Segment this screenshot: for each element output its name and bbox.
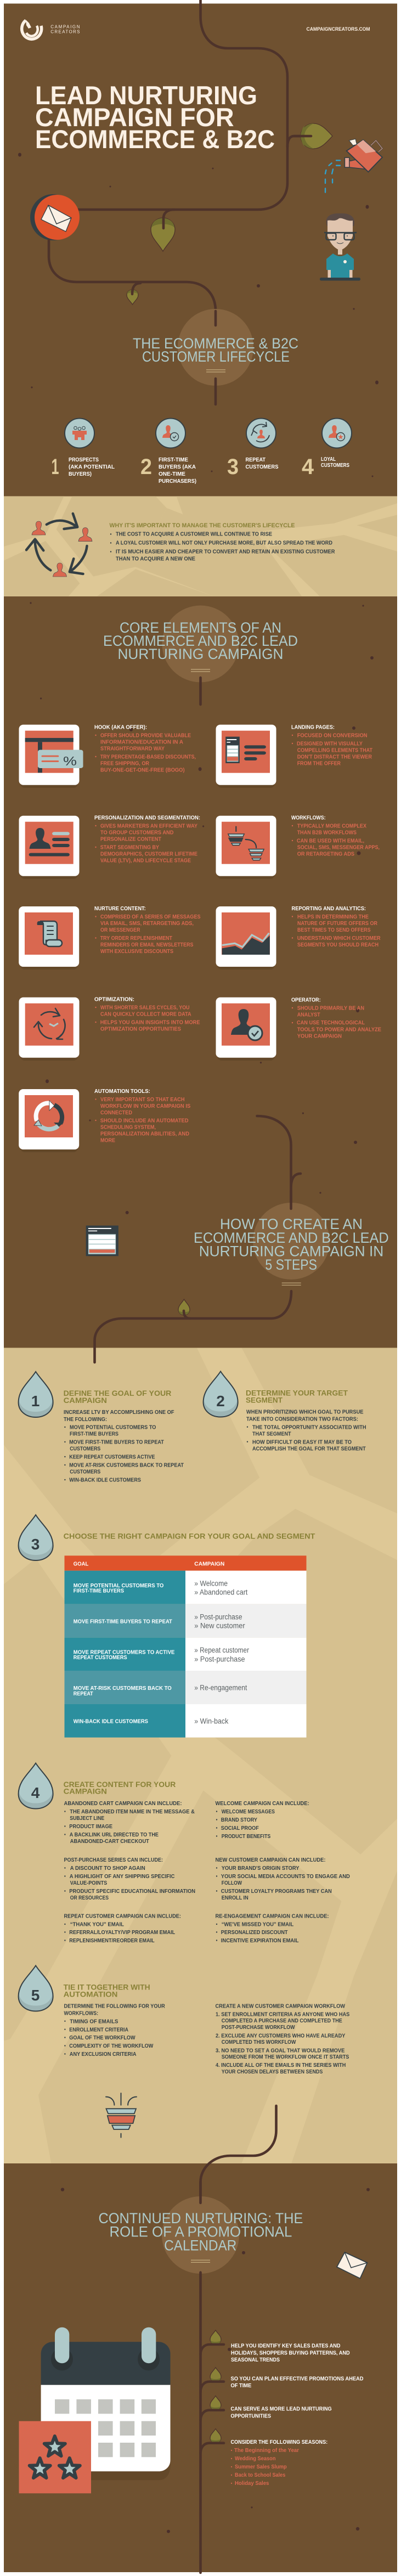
item: more opportunities: CAN SERVE AS MORE LEAD NURTURING bbox=[230, 2406, 332, 2412]
lifecycle stage 2: ONE-TIME bbox=[159, 471, 185, 477]
text: personalization: TO GROUP CUSTOMERS AND bbox=[100, 830, 173, 836]
icon: repeat customer circle bbox=[246, 418, 276, 448]
card: hook bbox=[19, 725, 83, 788]
icon: customer cycle bbox=[26, 514, 92, 577]
text: repeat customer: REPLENISHMENT/REORDER EMAIL bbox=[69, 1938, 155, 1944]
item: key dates: HOLIDAYS, SHOPPERS BUYING PATTERNS, AND bbox=[231, 2350, 350, 2356]
stem: lower vine bbox=[49, 240, 216, 325]
text: abandoned cart: ABANDONED-CART CHECKOUT bbox=[70, 1839, 149, 1845]
step 1: FIRST-TIME BUYERS bbox=[70, 1431, 118, 1438]
text: personalization bbox=[94, 815, 200, 864]
text: optimization: OPTIMIZATION OPPORTUNITIES bbox=[100, 1027, 181, 1033]
text: new customer: YOUR BRAND'S ORIGIN STORY bbox=[222, 1865, 300, 1872]
text: workflows: SOCIAL, SMS, MESSENGER APPS, bbox=[297, 845, 380, 851]
text: personalization: PERSONALIZE CONTENT bbox=[100, 837, 161, 843]
step 5 bbox=[19, 1965, 350, 2075]
lifecycle stage 4: LOYAL bbox=[321, 456, 336, 463]
text: optimization: HELPS YOU GAIN INSIGHTS INTO MORE bbox=[100, 1019, 200, 1025]
illustration: marketer at desk bbox=[320, 213, 360, 281]
text: automation tools: SCHEDULING SYSTEM, bbox=[100, 1125, 156, 1131]
text: automation tools bbox=[94, 1089, 191, 1144]
icon: drop 1: 1 bbox=[31, 1393, 39, 1410]
step 1: WIN-BACK IDLE CUSTOMERS bbox=[69, 1478, 141, 1484]
title: ECOMMERCE & B2C bbox=[35, 125, 275, 154]
step 4: CREATE CONTENT FOR YOUR bbox=[64, 1780, 176, 1789]
table: goal to campaign: » Re-engagement bbox=[194, 1684, 247, 1692]
panel: five steps bbox=[4, 1291, 397, 2163]
table: goal to campaign: » Repeat customer bbox=[194, 1646, 249, 1654]
text: automation tools: AUTOMATION TOOLS: bbox=[94, 1089, 150, 1095]
icon: drop 2: 2 bbox=[216, 1393, 225, 1410]
lifecycle stage 1: PROSPECTS bbox=[69, 457, 99, 463]
text: operator: OPERATOR: bbox=[291, 997, 321, 1003]
step 1: INCREASE LTV BY ACCOMPLISHING ONE OF bbox=[64, 1410, 174, 1416]
text: post-purchase: A HIGHLIGHT OF ANY SHIPPING SPECIFIC bbox=[70, 1874, 174, 1880]
text: welcome: PRODUCT BENEFITS bbox=[222, 1834, 270, 1840]
text: why it matters: THE COST TO ACQUIRE A CUSTOMER WILL CONTINUE TO RISE bbox=[116, 532, 272, 538]
item: seasons: Back to School Sales bbox=[235, 2472, 286, 2478]
step 2: WHEN PRIORITIZING WHICH GOAL TO PURSUE bbox=[246, 1409, 364, 1415]
text: automation tools: VERY IMPORTANT SO THAT EACH bbox=[100, 1097, 185, 1103]
text: workflow factors: ENROLLMENT CRITERIA bbox=[69, 2027, 128, 2033]
logo bbox=[22, 20, 80, 39]
table: goal to campaign: MOVE REPEAT CUSTOMERS TO ACTIVE bbox=[74, 1649, 175, 1655]
step 2 bbox=[204, 1372, 366, 1452]
text: personalization: VALUE (LTV), AND LIFECYCLE STAGE bbox=[100, 858, 191, 864]
icon: watering can bbox=[325, 139, 382, 193]
text: operator: ANALYST bbox=[297, 1012, 320, 1018]
text: why it matters: A LOYAL CUSTOMER WILL NOT ONLY PURCHASE MORE, BUT ALSO SPREAD THE WORD bbox=[116, 540, 332, 546]
icon: first-time buyer circle bbox=[156, 418, 185, 448]
table: goal to campaign: MOVE AT-RISK CUSTOMERS BACK TO bbox=[74, 1686, 172, 1692]
lifecycle stage 1 bbox=[52, 455, 115, 479]
card: automation tools bbox=[19, 1089, 79, 1152]
table: goal to campaign: CAMPAIGN bbox=[194, 1562, 224, 1568]
step 4 bbox=[19, 1763, 350, 1944]
step 2: ACCOMPLISH THE GOAL FOR THAT SEGMENT bbox=[252, 1446, 366, 1452]
text: abandoned cart: THE ABANDONED ITEM NAME IN THE MESSAGE & bbox=[70, 1809, 195, 1815]
text: post-purchase: OR RESOURCES bbox=[70, 1895, 109, 1901]
title: CAMPAIGN FOR bbox=[35, 103, 234, 132]
table: goal to campaign: MOVE FIRST-TIME BUYERS TO REPEAT bbox=[74, 1619, 172, 1625]
table: goal to campaign: » Post-purchase bbox=[194, 1613, 242, 1621]
icon: leaf on how-to vine bbox=[178, 1299, 190, 1318]
item: key dates: HELP YOU IDENTIFY KEY SALES DATES AND bbox=[231, 2343, 340, 2349]
step 5: AUTOMATION bbox=[64, 1990, 117, 1999]
text: personalization: START SEGMENTING BY bbox=[100, 845, 159, 851]
text: landing pages bbox=[291, 725, 372, 766]
icon: drop 2 bbox=[204, 1372, 238, 1417]
text: workflow factors: ANY EXCLUSION CRITERIA bbox=[70, 2051, 136, 2058]
text: post-purchase: A DISCOUNT TO SHOP AGAIN bbox=[70, 1865, 145, 1872]
text: re-engagement: PERSONALIZED DISCOUNT bbox=[221, 1930, 287, 1936]
lifecycle stage 3 bbox=[227, 455, 279, 479]
step 3 bbox=[19, 1515, 315, 1738]
step 1: CAMPAIGN bbox=[64, 1396, 107, 1405]
step 2: TAKE INTO CONSIDERATION TWO FACTORS: bbox=[246, 1416, 358, 1422]
text: abandoned cart: A BACKLINK URL DIRECTED TO THE bbox=[70, 1832, 159, 1838]
text: post-purchase: PRODUCT SPECIFIC EDUCATIONAL INFORMATION bbox=[69, 1889, 195, 1895]
lifecycle stage 2: FIRST-TIME bbox=[159, 457, 188, 463]
icon: right leaf bbox=[287, 123, 332, 149]
table: goal to campaign: » Post-purchase bbox=[194, 1655, 245, 1663]
lifecycle stage 1: BUYERS) bbox=[69, 471, 92, 477]
text: repeat customer bbox=[64, 1913, 181, 1944]
text: why it matters: IT IS MUCH EASIER AND CHEAPER TO CONVERT AND RETAIN AN EXISTING CUSTOMER bbox=[116, 549, 335, 555]
icon: loyal customer circle bbox=[322, 418, 352, 448]
text: landing pages: DON'T DISTRACT THE VIEWER bbox=[297, 754, 372, 760]
text: why it matters: THAN TO ACQUIRE A NEW ONE bbox=[116, 556, 195, 562]
step 4: CAMPAIGN bbox=[64, 1787, 107, 1796]
text: workflow factors: GOAL OF THE WORKFLOW bbox=[69, 2035, 135, 2041]
text: new customer workflow: POST-PURCHASE WORKFLOW bbox=[222, 2025, 295, 2031]
text: abandoned cart: SUBJECT LINE bbox=[70, 1816, 104, 1822]
step 5: TIE IT TOGETHER WITH bbox=[64, 1983, 150, 1992]
step 2: SEGMENT bbox=[246, 1396, 283, 1405]
text: repeat customer: REPEAT CUSTOMER CAMPAIGN CAN INCLUDE: bbox=[64, 1913, 181, 1919]
text: landing pages: COMPELLING ELEMENTS THAT bbox=[297, 747, 372, 753]
website url: CAMPAIGNCREATORS.COM bbox=[306, 26, 370, 32]
text: post-purchase: POST-PURCHASE SERIES CAN INCLUDE: bbox=[64, 1857, 163, 1863]
lifecycle stage 4: 4 bbox=[302, 455, 314, 479]
table: goal to campaign: GOAL bbox=[74, 1562, 88, 1568]
lifecycle stage 4: CUSTOMERS bbox=[321, 463, 349, 469]
text: nurture content bbox=[94, 906, 201, 955]
soil specks bbox=[30, 602, 374, 1214]
text: new customer: FOLLOW bbox=[222, 1880, 242, 1886]
heading: how to create: 5 STEPS bbox=[265, 1256, 317, 1273]
item: key dates bbox=[201, 2330, 350, 2363]
icon: small leaf on branch bbox=[127, 283, 140, 305]
heading: how to create: ECOMMERCE AND B2C LEAD bbox=[194, 1230, 389, 1246]
logo: CREATORS bbox=[50, 29, 80, 34]
text: hook bbox=[94, 725, 196, 774]
lifecycle stage 2 bbox=[140, 455, 196, 484]
table: goal to campaign: REPEAT CUSTOMERS bbox=[74, 1655, 127, 1661]
item: seasons: The Beginning of the Year bbox=[234, 2448, 299, 2454]
step 1: CUSTOMERS bbox=[70, 1469, 101, 1475]
text: new customer workflow: 2. EXCLUDE ANY CUSTOMERS WHO HAVE ALREADY bbox=[216, 2033, 346, 2039]
text: optimization: WITH SHORTER SALES CYCLES, YOU bbox=[100, 1005, 190, 1011]
text: new customer: CUSTOMER LOYALTY PROGRAMS THEY CAN bbox=[221, 1889, 332, 1895]
text: welcome: BRAND STORY bbox=[221, 1817, 257, 1823]
text: hook: HOOK (AKA OFFER): bbox=[94, 725, 147, 731]
icon: email circle bbox=[30, 194, 80, 240]
text: reporting and analytics bbox=[292, 906, 381, 948]
icon: drop 4 bbox=[19, 1763, 53, 1808]
text: re-engagement: INCENTIVE EXPIRATION EMAIL bbox=[221, 1938, 298, 1944]
table: goal to campaign bbox=[65, 1555, 306, 1738]
item: more opportunities bbox=[201, 2396, 332, 2421]
lifecycle stage 1: (AKA POTENTIAL bbox=[69, 464, 115, 470]
text: operator: SHOULD PRIMARILY BE AN bbox=[297, 1005, 364, 1011]
text: hook: INFORMATION/EDUCATION IN A bbox=[100, 740, 183, 746]
icon: drop 1 bbox=[19, 1372, 53, 1417]
text: landing pages: FROM THE OFFER bbox=[297, 760, 341, 766]
item: plan ahead: SO YOU CAN PLAN EFFECTIVE PROMOTIONS AHEAD bbox=[230, 2376, 363, 2382]
heading: core elements: ECOMMERCE AND B2C LEAD bbox=[103, 633, 298, 649]
icon: line chart bbox=[222, 933, 270, 955]
text: abandoned cart: ABANDONED CART CAMPAIGN CAN INCLUDE: bbox=[64, 1801, 182, 1807]
step 1 bbox=[19, 1372, 184, 1484]
lifecycle stage 4 bbox=[302, 455, 349, 479]
text: post-purchase bbox=[64, 1857, 195, 1901]
icon: three stars card bbox=[19, 2421, 91, 2493]
text: new customer workflow: COMPLETED A PURCHASE AND COMPLETED THE bbox=[222, 2018, 342, 2024]
text: workflows: TYPICALLY MORE COMPLEX bbox=[297, 824, 366, 830]
bullets: step 4 bbox=[64, 1811, 217, 1941]
text: workflows: CAN BE USED WITH EMAIL, bbox=[297, 838, 364, 844]
text: nurture content: OR MESSENGER bbox=[100, 927, 140, 933]
item: seasons bbox=[201, 2429, 327, 2487]
heading: continued nurturing: ROLE OF A PROMOTIONAL bbox=[110, 2224, 292, 2240]
item: more opportunities: OPPORTUNITIES bbox=[230, 2414, 271, 2420]
heading: core elements: CORE ELEMENTS OF AN bbox=[120, 619, 281, 636]
heading: core elements: NURTURING CAMPAIGN bbox=[117, 646, 283, 662]
panel: core elements bbox=[4, 596, 397, 1348]
text: landing pages: LANDING PAGES: bbox=[291, 725, 335, 731]
icon: drop 4: 4 bbox=[31, 1784, 40, 1801]
text: new customer workflow: 1. SET ENROLLMENT CRITERIA AS ANYONE WHO HAS bbox=[216, 2011, 350, 2017]
text: automation tools: WORKFLOW IN YOUR CAMPAIGN IS bbox=[100, 1103, 191, 1109]
text: nurture content: NURTURE CONTENT: bbox=[94, 906, 146, 912]
card: hook: % bbox=[63, 754, 77, 768]
text: repeat customer: REFERRAL/LOYALTY/VIP PROGRAM EMAIL bbox=[69, 1930, 175, 1936]
stem: continued vine bbox=[201, 2106, 276, 2203]
text: hook: TRY PERCENTAGE-BASED DISCOUNTS, bbox=[100, 754, 196, 760]
text: hook: STRAIGHTFORWARD WAY bbox=[100, 746, 165, 752]
step 2: DETERMINE YOUR TARGET bbox=[246, 1389, 348, 1397]
table: goal to campaign: REPEAT bbox=[74, 1691, 93, 1697]
heading: how to create bbox=[194, 1191, 389, 1285]
text: automation tools: PERSONALIZATION ABILITIES, AND bbox=[100, 1131, 189, 1137]
step 1: MOVE POTENTIAL CUSTOMERS TO bbox=[70, 1425, 156, 1431]
panel: header and lifecycle section bbox=[4, 0, 397, 496]
text: workflow factors: COMPLEXITY OF THE WORKFLOW bbox=[69, 2043, 154, 2049]
lifecycle stage 1: 1 bbox=[52, 455, 59, 479]
text: operator: YOUR CAMPAIGN bbox=[297, 1033, 342, 1039]
table: goal to campaign: » Win-back bbox=[194, 1717, 229, 1725]
text: post-purchase: VALUE-POINTS bbox=[70, 1880, 108, 1886]
text: new customer workflow: SOMEONE FROM THE WORKFLOW ONCE IT STARTS bbox=[222, 2054, 349, 2060]
text: automation tools: CONNECTED bbox=[100, 1110, 132, 1116]
heading: customer lifecycle: CUSTOMER LIFECYCLE bbox=[142, 348, 290, 365]
item: seasons: Holiday Sales bbox=[235, 2481, 269, 2487]
heading: continued nurturing: CALENDAR bbox=[164, 2237, 236, 2253]
text: automation tools: SHOULD INCLUDE AN AUTOMATED bbox=[100, 1118, 189, 1124]
step 1: CUSTOMERS bbox=[70, 1446, 101, 1452]
text: new customer: YOUR SOCIAL MEDIA ACCOUNTS TO ENGAGE AND bbox=[221, 1874, 350, 1880]
text: hook: OFFER SHOULD PROVIDE VALUABLE bbox=[100, 733, 191, 739]
card: nurture content bbox=[19, 906, 79, 969]
text: optimization: CAN QUICKLY COLLECT MORE DATA bbox=[100, 1012, 191, 1018]
table: goal to campaign: MOVE POTENTIAL CUSTOMERS TO bbox=[74, 1583, 164, 1589]
text: nurture content: TRY ORDER REPLENISHMENT bbox=[100, 935, 172, 942]
item: seasons: Summer Sales Slump bbox=[235, 2464, 287, 2470]
heading: core elements bbox=[103, 606, 298, 704]
text: new customer bbox=[215, 1857, 350, 1901]
text: workflows: WORKFLOWS: bbox=[291, 815, 326, 821]
heading: continued nurturing bbox=[99, 2182, 303, 2274]
soil specks bbox=[61, 2188, 370, 2533]
text: welcome bbox=[215, 1801, 309, 1840]
item: plan ahead: OF TIME bbox=[230, 2383, 252, 2389]
text: workflow factors: DETERMINE THE FOLLOWING FOR YOUR bbox=[64, 2003, 165, 2009]
text: nurture content: REMINDERS OR EMAIL NEWSLETTERS bbox=[100, 942, 194, 948]
icon: drop 5 bbox=[19, 1965, 53, 2011]
stem: how-to vine bbox=[257, 1116, 301, 1209]
text: operator bbox=[291, 997, 381, 1039]
step 1: DEFINE THE GOAL OF YOUR bbox=[64, 1389, 171, 1397]
title: LEAD NURTURING bbox=[35, 81, 257, 110]
text: hook: BUY-ONE-GET-ONE-FREE (BOGO) bbox=[100, 768, 185, 774]
step 1: THE FOLLOWING: bbox=[64, 1417, 107, 1423]
card: personalization bbox=[19, 816, 79, 879]
text: new customer: ENROLL IN bbox=[222, 1895, 248, 1901]
text: landing pages: FOCUSED ON CONVERSION bbox=[297, 733, 368, 739]
icon: drop 3: 3 bbox=[31, 1536, 39, 1553]
illustration: calendar bbox=[19, 2327, 170, 2493]
step 2: THE TOTAL OPPORTUNITY ASSOCIATED WITH bbox=[252, 1424, 366, 1430]
text: personalization: DEMOGRAPHICS, CUSTOMER LIFETIME bbox=[100, 851, 197, 857]
text: nurture content: VIA EMAIL, SMS, RETARGETING ADS, bbox=[100, 921, 194, 927]
icon: floating form bbox=[86, 1226, 118, 1256]
text: workflows: THAN B2B WORKFLOWS bbox=[297, 830, 357, 836]
text: hook: FREE SHIPPING, OR bbox=[100, 760, 150, 766]
heading: how to create: NURTURING CAMPAIGN IN bbox=[199, 1243, 383, 1259]
icon: flying envelope bbox=[337, 2252, 368, 2279]
icon: automation arrows bbox=[34, 1101, 64, 1129]
text: repeat customer: “THANK YOU” EMAIL bbox=[70, 1921, 124, 1927]
text: personalization: GIVES MARKETERS AN EFFICIENT WAY bbox=[100, 824, 197, 830]
text: workflows bbox=[291, 815, 380, 857]
step 2: HOW DIFFICULT OR EASY IT MAY BE TO bbox=[252, 1439, 352, 1445]
text: why it matters bbox=[110, 522, 335, 562]
step 3: CHOOSE THE RIGHT CAMPAIGN FOR YOUR GOAL AND SEGMENT bbox=[64, 1532, 315, 1541]
panel: why lifecycle matters bbox=[4, 496, 397, 596]
step 1: MOVE AT-RISK CUSTOMERS BACK TO REPEAT bbox=[69, 1463, 184, 1469]
text: reporting and analytics: BEST TIMES TO SEND OFFERS bbox=[297, 927, 371, 933]
table: goal to campaign: » Abandoned cart bbox=[194, 1588, 248, 1597]
table: goal to campaign: » Welcome bbox=[194, 1580, 228, 1588]
heading: customer lifecycle: THE ECOMMERCE & B2C bbox=[133, 335, 298, 352]
text: nurture content: WITH EXCLUSIVE DISCOUNTS bbox=[100, 949, 173, 955]
icon: drop 5: 5 bbox=[31, 1987, 39, 2004]
card: reporting and analytics bbox=[216, 906, 276, 969]
item: plan ahead bbox=[201, 2368, 363, 2392]
icon: optimization cycle bbox=[34, 1008, 65, 1039]
lifecycle stage 2: 2 bbox=[140, 455, 152, 479]
icon: large leaf on branch bbox=[151, 210, 175, 251]
table: goal to campaign: » New customer bbox=[194, 1622, 245, 1630]
text: new customer workflow bbox=[215, 2003, 350, 2075]
text: workflow factors bbox=[64, 2003, 165, 2058]
stem: calendar trunk bbox=[199, 2273, 202, 2573]
text: re-engagement bbox=[215, 1913, 329, 1944]
step 2: THAT SEGMENT bbox=[252, 1431, 291, 1437]
text: workflow factors: WORKFLOWS: bbox=[64, 2010, 98, 2016]
panel: promotional calendar bbox=[4, 2106, 397, 2573]
stem: top vine bbox=[78, 0, 287, 210]
text: reporting and analytics: NATURE OF FUTURE OFFERS OR bbox=[297, 921, 378, 927]
text: re-engagement: RE-ENGAGEMENT CAMPAIGN CAN INCLUDE: bbox=[215, 1913, 329, 1919]
text: abandoned cart bbox=[64, 1801, 195, 1845]
lifecycle stage 2: BUYERS (AKA bbox=[159, 464, 196, 470]
icon: automation funnel bbox=[106, 2093, 137, 2138]
card: workflows bbox=[216, 816, 276, 879]
text: optimization bbox=[94, 997, 200, 1033]
text: new customer workflow: YOUR CHOSEN DELAYS BETWEEN SENDS bbox=[222, 2069, 323, 2075]
icon: scroll bbox=[37, 921, 62, 946]
text: personalization: PERSONALIZATION AND SEGMENTATION: bbox=[94, 815, 200, 821]
text: landing pages: DESIGNED WITH VISUALLY bbox=[297, 741, 363, 747]
text: reporting and analytics: HELPS IN DETERMINING THE bbox=[297, 914, 369, 920]
step 1: KEEP REPEAT CUSTOMERS ACTIVE bbox=[69, 1455, 155, 1461]
heading: continued nurturing: CONTINUED NURTURING: THE bbox=[99, 2210, 303, 2226]
text: welcome: SOCIAL PROOF bbox=[221, 1825, 259, 1831]
text: operator: TOOLS TO POWER AND ANALYZE bbox=[297, 1027, 381, 1033]
icon: operator silhouette bbox=[231, 1009, 262, 1040]
text: optimization: OPTIMIZATION: bbox=[94, 997, 134, 1003]
text: reporting and analytics: SEGMENTS YOU SHOULD REACH bbox=[297, 942, 379, 948]
card: landing pages bbox=[216, 725, 276, 788]
heading: customer lifecycle bbox=[133, 309, 298, 404]
text: workflows: OR RETARGETING ADS bbox=[297, 851, 354, 857]
item: seasons: Wedding Season bbox=[235, 2456, 275, 2462]
lifecycle stage 3: REPEAT bbox=[246, 457, 266, 463]
title bbox=[35, 81, 275, 154]
text: workflow factors: TIMING OF EMAILS bbox=[70, 2019, 118, 2025]
text: nurture content: COMPRISED OF A SERIES OF MESSAGES bbox=[100, 914, 201, 920]
card: optimization bbox=[19, 997, 79, 1061]
text: abandoned cart: PRODUCT IMAGE bbox=[69, 1824, 112, 1830]
lifecycle stage 3: 3 bbox=[227, 455, 239, 479]
lifecycle stage 3: CUSTOMERS bbox=[246, 464, 279, 470]
item: key dates: SEASONAL TRENDS bbox=[231, 2357, 280, 2363]
text: automation tools: MORE bbox=[100, 1138, 115, 1144]
soil specks bbox=[18, 153, 379, 477]
text: new customer workflow: 3. NO NEED TO SET A GOAL THAT WOULD REMOVE bbox=[216, 2048, 345, 2054]
text: reporting and analytics: REPORTING AND ANALYTICS: bbox=[292, 906, 366, 912]
text: welcome: WELCOME MESSAGES bbox=[222, 1809, 275, 1815]
text: new customer workflow: CREATE A NEW CUSTOMER CAMPAIGN WORKFLOW bbox=[215, 2003, 346, 2009]
logo: CAMPAIGN bbox=[50, 25, 80, 30]
table: goal to campaign: WIN-BACK IDLE CUSTOMERS bbox=[74, 1719, 148, 1725]
text: reporting and analytics: UNDERSTAND WHICH CUSTOMER bbox=[297, 935, 381, 942]
heading: how to create: HOW TO CREATE AN bbox=[220, 1216, 363, 1232]
text: operator: CAN USE TECHNOLOGICAL bbox=[297, 1020, 365, 1026]
card: operator bbox=[216, 997, 276, 1061]
text: new customer workflow: 4. INCLUDE ALL OF THE EMAILS IN THE SERIES WITH bbox=[216, 2062, 346, 2068]
text: new customer: NEW CUSTOMER CAMPAIGN CAN INCLUDE: bbox=[215, 1857, 326, 1863]
table: goal to campaign: FIRST-TIME BUYERS bbox=[74, 1588, 124, 1594]
text: re-engagement: “WE'VE MISSED YOU” EMAIL bbox=[222, 1921, 293, 1927]
lifecycle stage 2: PURCHASERS) bbox=[159, 478, 196, 484]
step 1: MOVE FIRST-TIME BUYERS TO REPEAT bbox=[69, 1440, 164, 1446]
icon: envelope bbox=[41, 205, 71, 232]
icon: prospects circle bbox=[65, 418, 94, 448]
item: seasons: CONSIDER THE FOLLOWING SEASONS: bbox=[230, 2439, 327, 2445]
stem: step vine bbox=[94, 1291, 291, 1362]
text: why it matters: WHY IT'S IMPORTANT TO MANAGE THE CUSTOMER'S LIFECYCLE bbox=[110, 522, 295, 529]
icon: drop 3 bbox=[19, 1515, 53, 1560]
text: new customer workflow: COMPLETED THIS WORKFLOW bbox=[222, 2039, 296, 2045]
text: welcome: WELCOME CAMPAIGN CAN INCLUDE: bbox=[215, 1801, 309, 1807]
